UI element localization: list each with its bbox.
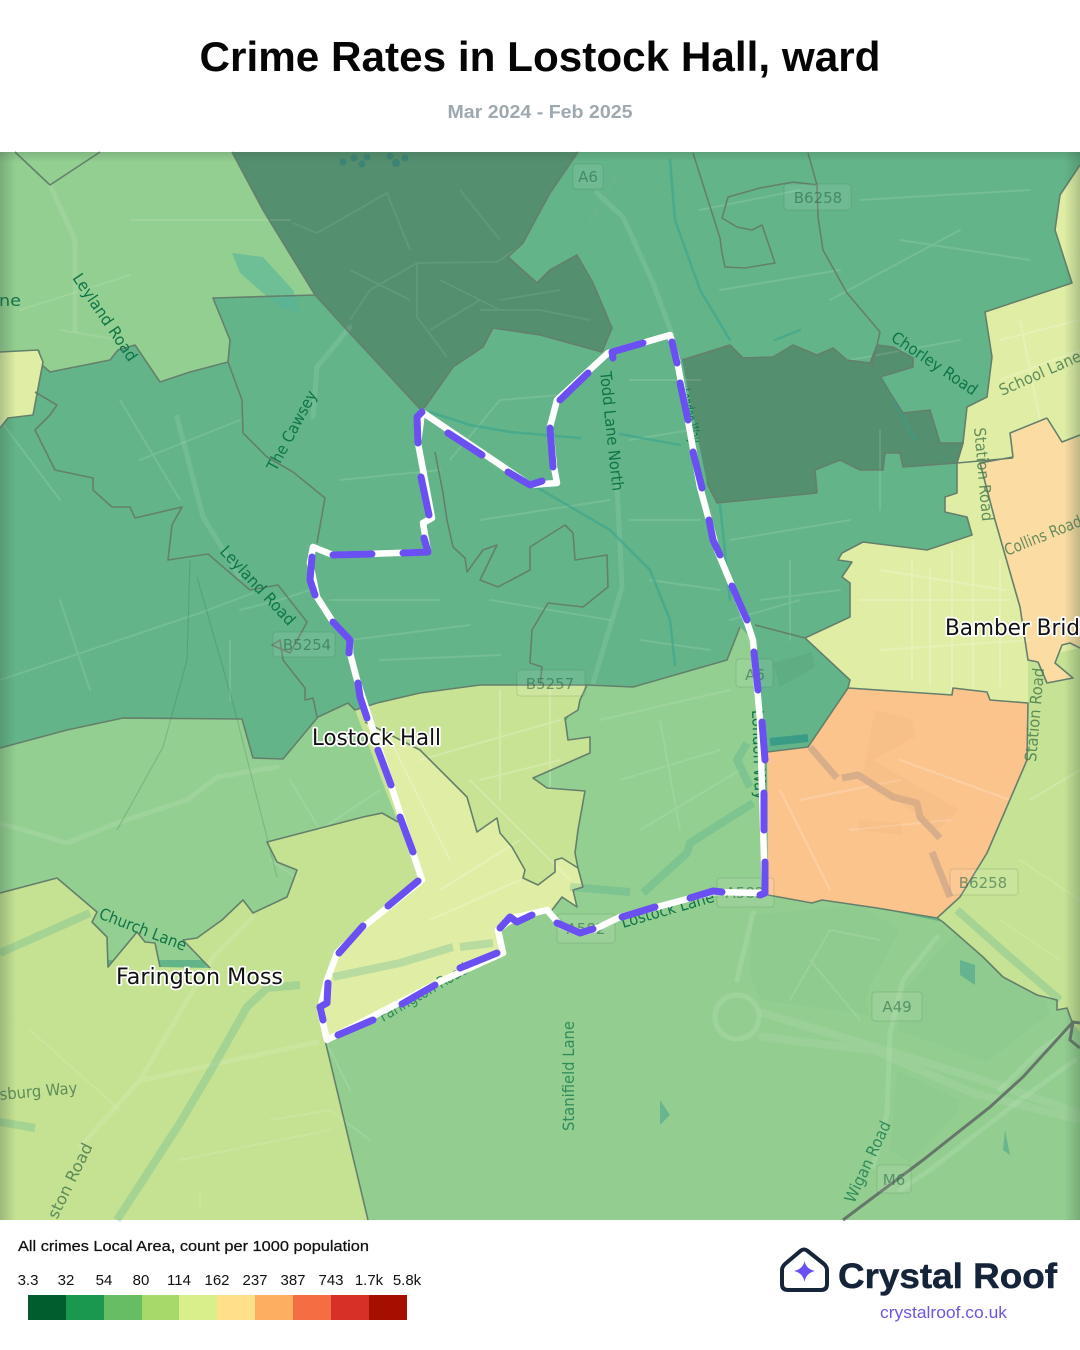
place labels: Lostock Hall (312, 726, 441, 751)
logo: Crystal Roof (782, 1250, 1057, 1322)
area: east light orange (980, 418, 1080, 683)
wordmark: Crystal Roof (838, 1257, 1057, 1296)
subtitle: date range: Mar 2024 - Feb 2025 (448, 102, 632, 122)
legend scale values: 114 (167, 1272, 191, 1289)
legend scale values: 743 (318, 1272, 344, 1289)
road number shields: A6 (745, 666, 765, 684)
road number shields: A582 (726, 884, 764, 902)
legend scale values: 1.7k (355, 1272, 384, 1289)
road labels: Farington Road (376, 959, 472, 1025)
road number shields (273, 164, 1018, 1193)
legend scale values (18, 1272, 422, 1289)
area: east yellow green (937, 643, 1080, 1032)
road labels (0, 270, 1080, 1222)
area: central yellow green (355, 685, 590, 900)
area: south block shading (750, 905, 1050, 1163)
road labels: Church Lane (97, 904, 189, 955)
road number shields: B5254 (283, 636, 331, 654)
ward boundary: white line with purple dashes (310, 335, 765, 1040)
area boundaries (0, 152, 1080, 1220)
road labels: London Way (675, 387, 705, 445)
road labels: Chorley Road (888, 328, 981, 399)
legend scale values: 54 (96, 1272, 112, 1289)
icon: house with star (782, 1250, 827, 1290)
road labels: Leyland Road (216, 542, 300, 629)
legend scale values: 237 (242, 1272, 268, 1289)
area: north-east pale yellow (805, 165, 1080, 703)
road number shields: A6 (578, 168, 598, 186)
legend scale values: 387 (280, 1272, 306, 1289)
peach area stream (810, 747, 950, 897)
road number shields: B5257 (526, 675, 574, 693)
legend title: All crimes Local Area, count per 1000 population (18, 1238, 369, 1255)
peach area shading and building (858, 710, 960, 835)
road labels: Wigan Road (840, 1118, 895, 1206)
road labels: ston Road (44, 1140, 97, 1222)
legend scale values: 80 (133, 1272, 149, 1289)
map (0, 152, 1080, 1222)
road labels: sburg Way (0, 1078, 78, 1104)
road labels: Todd Lane North (596, 370, 627, 492)
road labels: Stanifield Lane (559, 1021, 578, 1131)
area: dark shading blocks (773, 652, 815, 687)
road labels: Station Road (1021, 667, 1048, 762)
area: north-east low crime dark green (682, 345, 963, 503)
road number shields: A49 (882, 998, 912, 1016)
area: south-east high crime orange (767, 688, 1028, 918)
road number shields: B6258 (959, 874, 1007, 892)
road labels: The Cawsey (262, 387, 321, 475)
legend scale values: 3.3 (18, 1272, 38, 1289)
legend scale values: 32 (58, 1272, 74, 1289)
area: west pale yellow (0, 350, 43, 428)
legend scale values: 5.8k (393, 1272, 422, 1289)
road labels: Station Road (970, 427, 997, 522)
website url: crystalroof.co.uk (880, 1303, 1008, 1322)
legend colour swatches (28, 1295, 407, 1320)
title: Crime Rates in Lostock Hall, ward (200, 33, 880, 80)
water: streams and ponds (0, 152, 1060, 1220)
area: south-west light green (0, 703, 430, 960)
area: north low crime dark green (232, 152, 612, 410)
road number shields: A582 (567, 920, 605, 938)
map base: mid green areas (0, 152, 1080, 1220)
road labels: Lostock Lane (619, 887, 716, 932)
road labels: London Way (748, 709, 770, 800)
area: south light green (325, 892, 1080, 1220)
tree dots north (340, 152, 408, 168)
area: Farington yellow green (0, 813, 420, 1220)
road labels: Leyland Road (69, 270, 141, 365)
area: east of ward light green (520, 627, 765, 933)
roads and streets (0, 170, 1080, 1210)
place labels (116, 616, 1080, 990)
road number shields: M6 (883, 1171, 905, 1189)
place labels: Farington Moss (116, 965, 283, 990)
place labels: Bamber Brid (945, 616, 1080, 641)
legend scale values: 162 (204, 1272, 230, 1289)
area: north-west light green (0, 152, 315, 382)
edge vignette (0, 152, 1080, 1220)
legend (18, 1238, 422, 1320)
area: ward pale yellow (320, 722, 583, 1040)
road number shields: B6258 (794, 189, 842, 207)
